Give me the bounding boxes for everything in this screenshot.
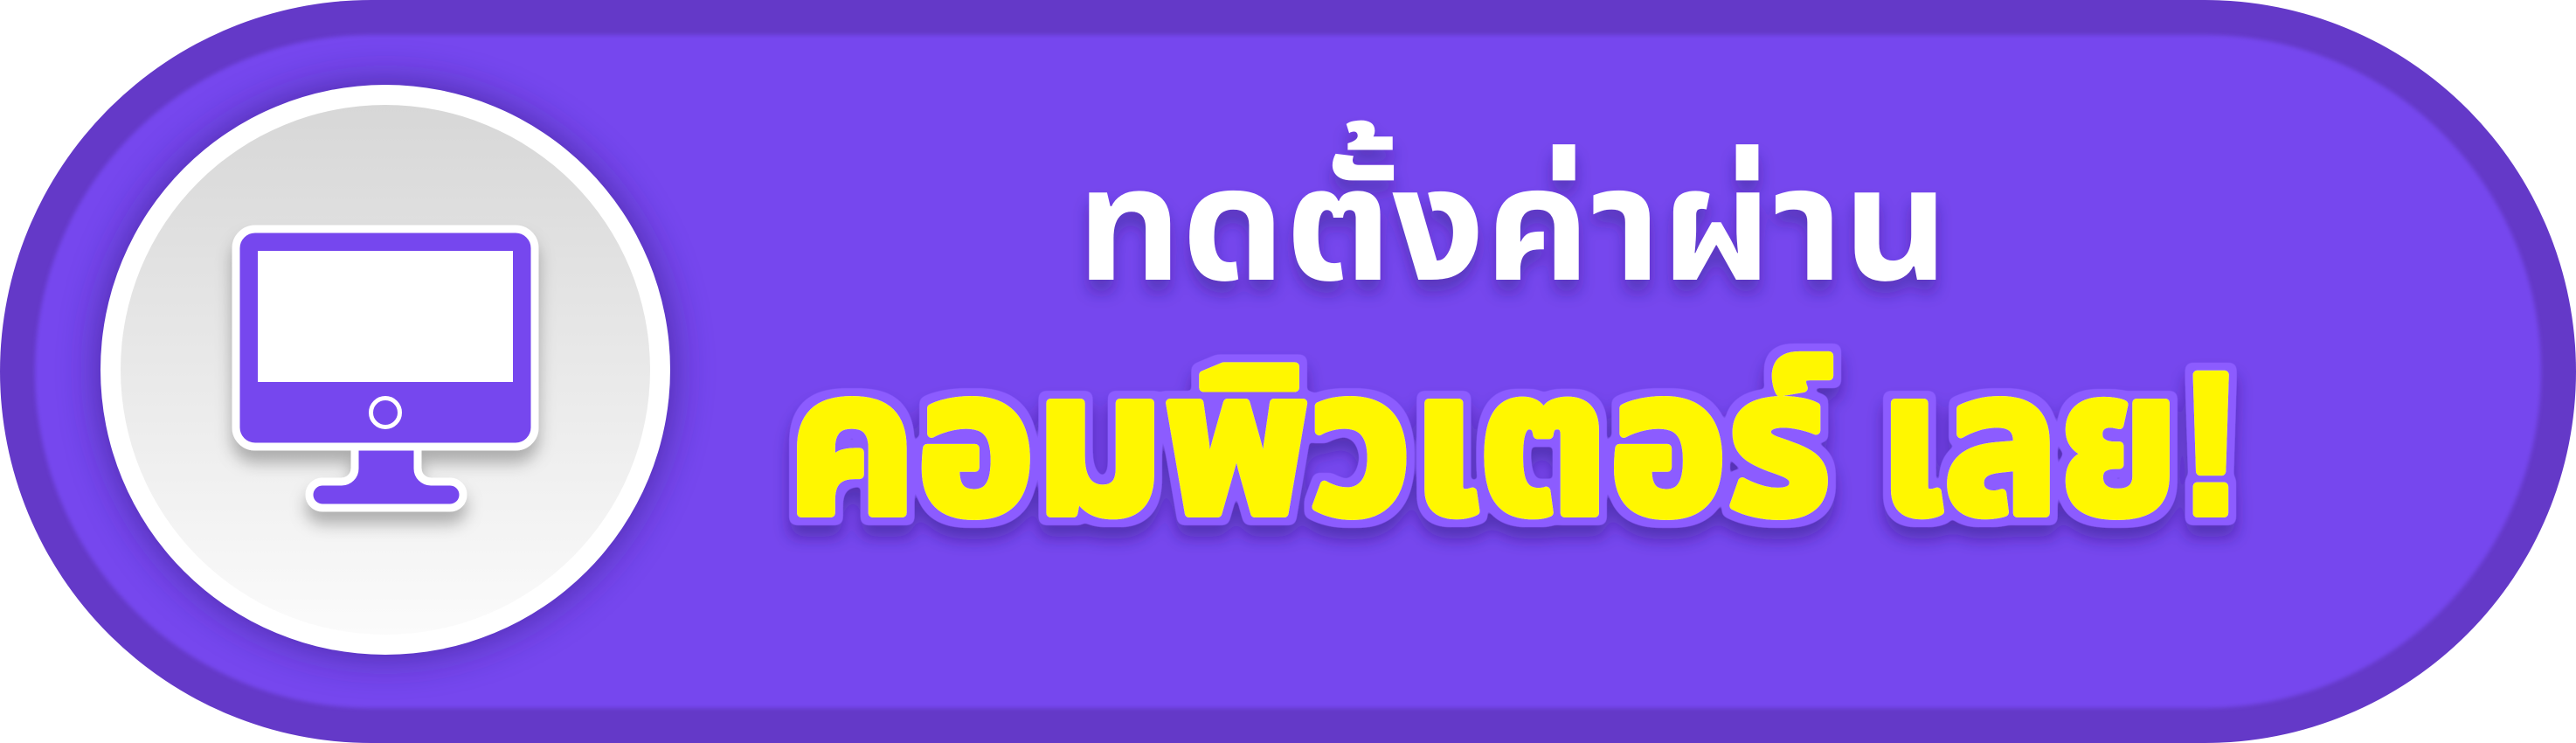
icon: monitor: [236, 229, 535, 508]
monitor screen: [258, 251, 513, 382]
badge gradient disc: [121, 105, 650, 635]
monitor stand: [309, 441, 463, 508]
badge shadow: [100, 85, 670, 655]
heading line two: เลย!: [1879, 331, 2243, 556]
badge white ring: [100, 85, 670, 655]
heading line one: ทดตั้งค่าผ่าน: [1077, 120, 1949, 314]
monitor button: [370, 399, 400, 427]
icon badge: computer monitor: [100, 85, 670, 655]
heading line two: คอมพิวเตอร์: [787, 331, 1831, 556]
monitor body: [236, 229, 535, 447]
